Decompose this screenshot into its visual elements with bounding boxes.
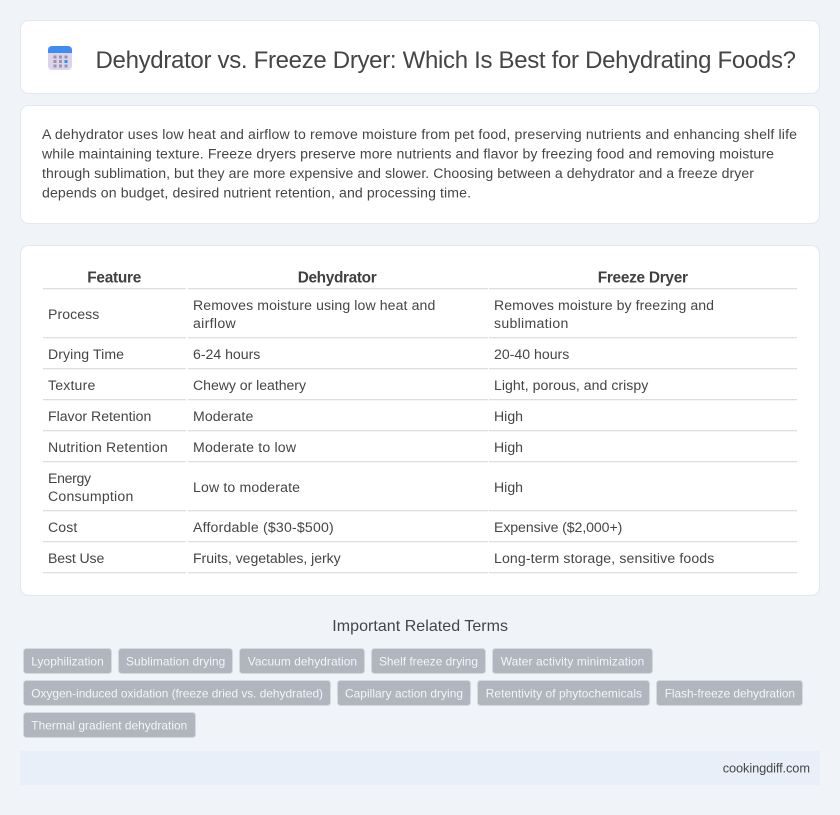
table header: Freeze Dryer [598,270,688,286]
row: process: Removes moisture using low heat and [193,297,435,313]
row: energy consumption: Low to moderate [193,479,300,495]
row: flavor retention: High [494,408,523,424]
row: flavor retention [48,408,523,424]
tag [24,680,330,706]
row: nutrition retention [48,439,523,455]
row: flavor retention: Moderate [193,408,253,424]
row: drying time [48,346,569,362]
tag: Capillary action drying [345,686,463,700]
tags: related terms [24,648,802,738]
tag: Thermal gradient dehydration [31,718,187,732]
tag: Vacuum dehydration [248,654,357,668]
intro text: depends on budget, desired nutrient retention, and processing time. [42,184,471,200]
row: drying time: 6-24 hours [193,346,260,362]
tag [240,648,364,674]
row: best use: Best Use [48,550,104,566]
row: cost: Affordable ($30-$500) [193,519,334,535]
title: Dehydrator vs. Freeze Dryer: Which Is Best for Dehydrating Foods? [96,47,796,74]
tag [656,680,802,706]
row: energy consumption: High [494,479,523,495]
heading: important related terms: Important Related Terms [332,618,508,635]
row: texture [48,377,649,393]
footer source: cookingdiff.com [723,760,810,775]
row: best use [48,550,714,566]
row: energy consumption: Energy [48,470,92,486]
tag: Retentivity of phytochemicals [486,686,642,700]
row: texture: Chewy or leathery [193,377,307,393]
row: texture: Light, porous, and crispy [494,377,649,393]
row: drying time: 20-40 hours [494,346,569,362]
row: best use: Long-term storage, sensitive foods [494,550,714,566]
row: nutrition retention: Moderate to low [193,439,297,455]
intro text: through sublimation, but they are more expensive and slower. Choosing between a dehydrator and a freeze dryer [42,165,754,181]
row: energy consumption [48,470,523,504]
row: energy consumption: Consumption [48,488,133,504]
row: texture: Texture [48,377,95,393]
tag [24,648,112,674]
tag: Water activity minimization [501,654,644,668]
row: process: Removes moisture by freezing and [494,297,714,313]
row: nutrition retention: High [494,439,523,455]
panel: header [20,20,820,94]
row: process [48,297,714,331]
panel: comparison table [20,246,820,596]
tag: Flash-freeze dehydration [665,686,795,700]
footer [20,751,820,785]
table header: Dehydrator [298,270,377,286]
row: process: sublimation [494,315,568,331]
row: best use: Fruits, vegetables, jerky [193,550,342,566]
tag [24,712,196,738]
row: cost [48,519,622,535]
intro text [41,126,797,200]
tag: Sublimation drying [126,654,225,668]
row: cost: Expensive ($2,000+) [494,519,622,535]
tag: Oxygen-induced oxidation (freeze dried vs. dehydrated) [31,686,323,700]
table header: Feature [87,270,142,286]
tag [338,680,470,706]
icon: calendar [48,46,72,70]
row: nutrition retention: Nutrition Retention [48,439,168,455]
tag [118,648,232,674]
intro text: while maintaining texture. Freeze dryers preserve more nutrients and flavor by freezing food and removing moisture [41,146,774,162]
row: flavor retention: Flavor Retention [48,408,151,424]
tag [492,648,652,674]
row: cost: Cost [48,519,77,535]
row: drying time: Drying Time [48,346,124,362]
tag [372,648,486,674]
row: process: Process [48,306,99,322]
intro text: A dehydrator uses low heat and airflow to remove moisture from pet food, preserving nutrients and enhancing shelf life [42,126,797,142]
row: process: airflow [193,315,237,331]
tag [478,680,650,706]
table header [87,270,688,286]
tag: Shelf freeze drying [379,654,478,668]
panel: introduction [20,106,820,224]
tag: Lyophilization [31,654,104,668]
